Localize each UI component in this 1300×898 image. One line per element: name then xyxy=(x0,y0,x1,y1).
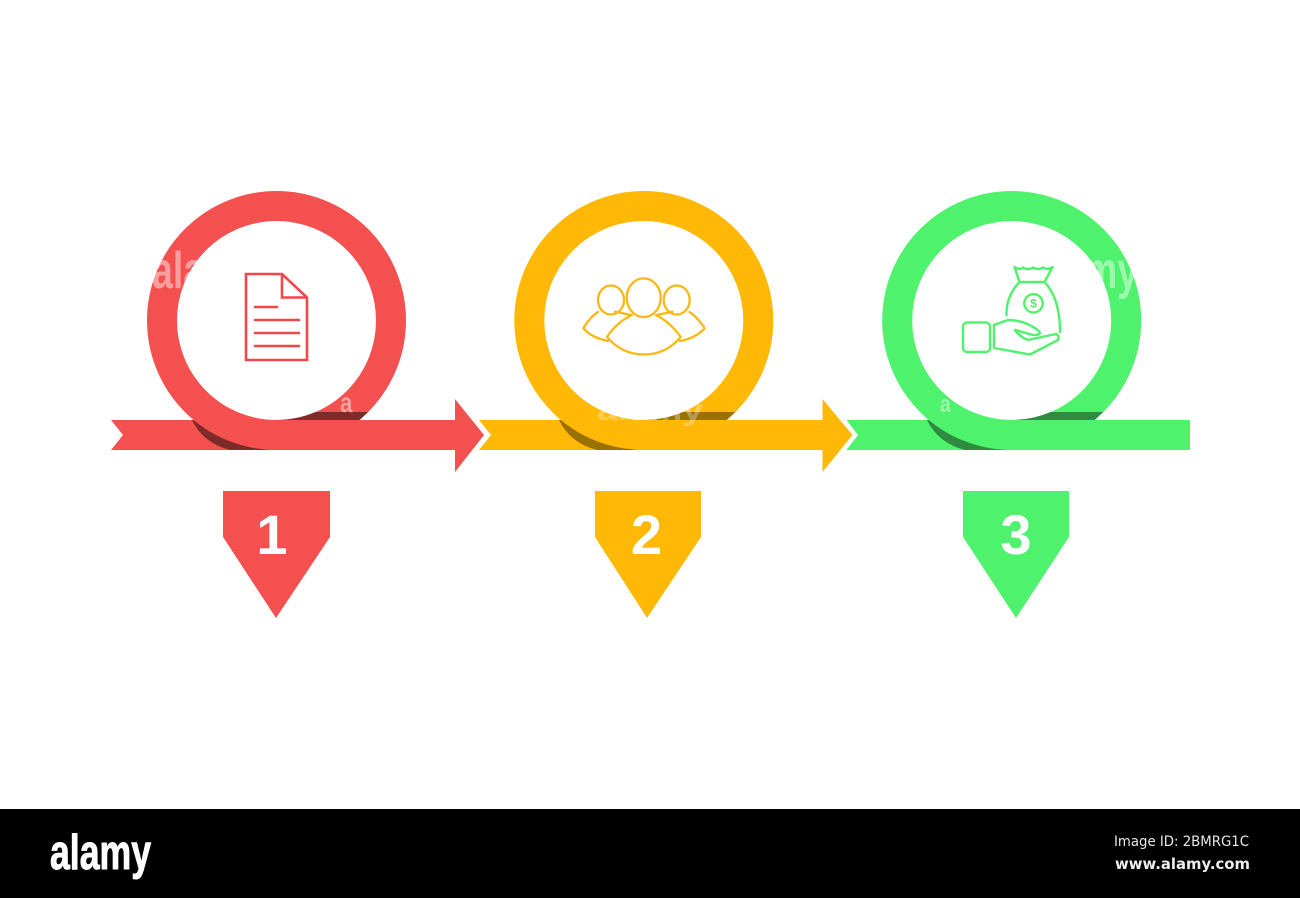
shadow: red left crescent xyxy=(192,420,272,450)
website: www.alamy.com xyxy=(1115,855,1250,873)
arrow bar: green xyxy=(846,420,1190,450)
pointer shape xyxy=(595,491,701,618)
number 2: 2 xyxy=(631,503,662,566)
loop ring: green xyxy=(897,206,1126,435)
arrow bar: yellow xyxy=(479,399,852,472)
icon: document xyxy=(246,274,307,360)
watermark fragment: ala xyxy=(152,241,205,299)
icon: people group xyxy=(583,278,705,354)
watermark fragment: alamy xyxy=(597,394,703,427)
loop ring: red xyxy=(162,206,391,435)
shadow: red right fold xyxy=(276,412,368,420)
badge 2 xyxy=(595,491,701,618)
bar overlay: yellow xyxy=(637,420,823,450)
watermark fragment: my xyxy=(1084,241,1138,299)
number 1: 1 xyxy=(256,503,288,566)
watermark fragment: a xyxy=(940,390,951,418)
step 2: yellow loop arrow xyxy=(479,206,852,472)
dollar sign: $ xyxy=(1030,296,1037,310)
shadow: green left crescent xyxy=(927,420,1007,450)
footer bar xyxy=(0,809,1300,898)
alamy logo: alamy xyxy=(50,826,151,880)
icon: money bag on hand xyxy=(963,267,1060,354)
watermark fragment: a xyxy=(340,388,353,419)
step 1: red loop arrow xyxy=(111,206,484,472)
number 3: 3 xyxy=(1000,503,1032,566)
shadow: green right fold xyxy=(1012,412,1103,420)
pointer shape xyxy=(223,491,330,618)
badge 3 xyxy=(963,491,1069,618)
step 3: green loop bar xyxy=(846,206,1190,450)
shadow: yellow right fold xyxy=(644,412,735,420)
pointer shape xyxy=(963,491,1069,618)
badge 1 xyxy=(223,491,330,618)
loop ring: yellow xyxy=(529,206,758,435)
arrow bar: red xyxy=(111,399,484,472)
bar overlay: red xyxy=(270,420,456,450)
image id: Image ID: 2BMRG1C xyxy=(1114,834,1249,850)
bar overlay: green xyxy=(1005,420,1190,450)
shadow: yellow left crescent xyxy=(559,420,639,450)
